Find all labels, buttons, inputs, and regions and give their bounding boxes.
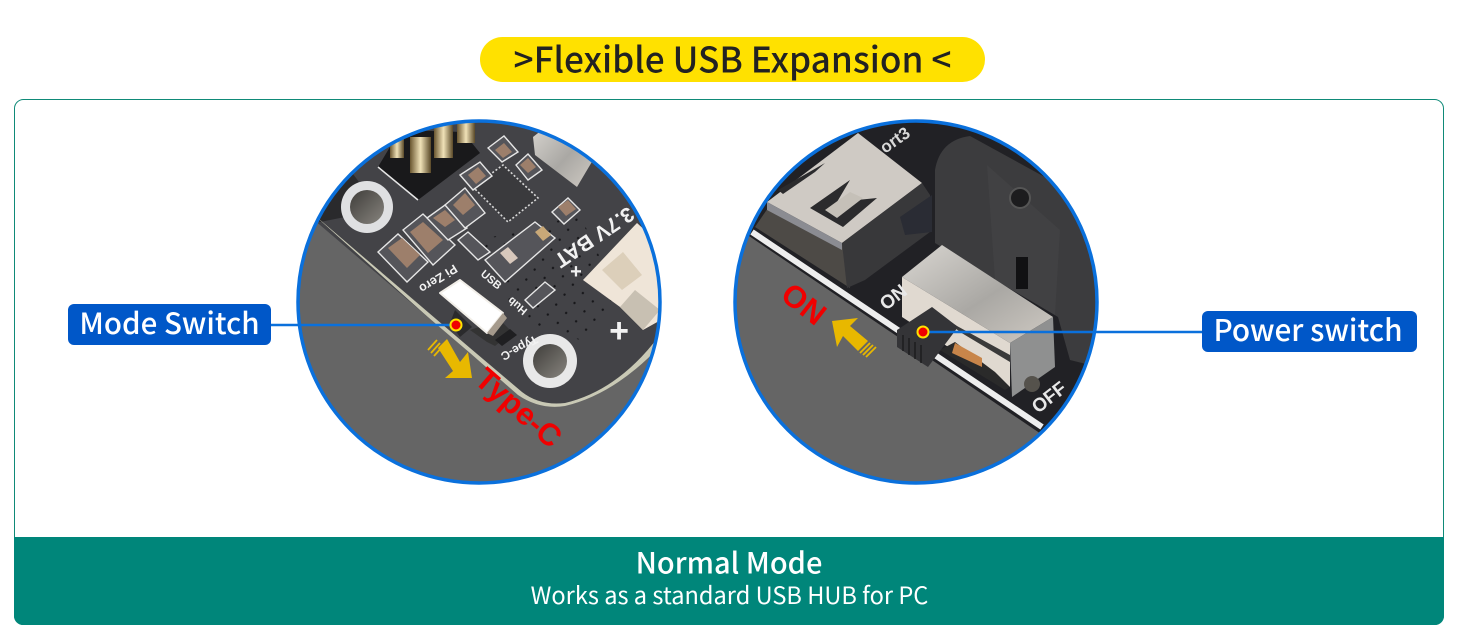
silk labels bbox=[416, 202, 638, 364]
vias bbox=[485, 218, 612, 340]
silk labels: Type-C bbox=[498, 332, 540, 364]
silk: ON OFF: ON bbox=[876, 281, 912, 315]
board dark upper-left bbox=[319, 174, 359, 222]
arrow: toward ON bbox=[832, 318, 876, 357]
label: ON: ON bbox=[775, 276, 833, 332]
callout: power switch: Power switch bbox=[1213, 307, 1403, 350]
arrow: toward Type-C bbox=[428, 339, 472, 378]
capacitors bbox=[388, 143, 576, 268]
footer heading: Normal Mode bbox=[636, 540, 822, 582]
silk labels: 3.7V BAT bbox=[550, 202, 638, 272]
footer description: Works as a standard USB HUB for PC bbox=[531, 577, 928, 611]
board edge bbox=[312, 213, 662, 410]
chip bbox=[473, 165, 538, 222]
mounting hole bottom bbox=[523, 334, 577, 388]
label: Type-C: Type-C bbox=[468, 361, 569, 455]
silkscreen pads bbox=[378, 136, 580, 308]
crystal bbox=[533, 132, 592, 187]
connector bbox=[583, 223, 658, 330]
footer band: normal mode bbox=[14, 537, 1444, 625]
battery holder bbox=[935, 136, 1096, 364]
silk labels: + bbox=[570, 261, 582, 283]
photo: mode switch close-up bbox=[296, 119, 662, 485]
gray base cutaway bbox=[300, 224, 650, 482]
silk: ON OFF: OFF bbox=[1028, 378, 1071, 418]
silk: port3: ort3 bbox=[876, 123, 914, 157]
photo: power switch close-up bbox=[733, 119, 1099, 485]
board edge bbox=[752, 232, 1042, 427]
callout: mode switch bbox=[68, 301, 462, 345]
switch bbox=[440, 280, 517, 346]
mounting hole top bbox=[341, 181, 393, 233]
silk labels: Pi Zero bbox=[416, 261, 460, 296]
silk labels: Hub bbox=[506, 294, 530, 317]
USB port bbox=[755, 133, 932, 288]
gray base cutaway bbox=[736, 236, 1039, 482]
slide knob bbox=[897, 307, 958, 367]
title badge: >Flexible USB Expansion < bbox=[514, 32, 951, 84]
callout: mode switch: Mode Switch bbox=[79, 301, 260, 343]
silk labels: + bbox=[609, 312, 629, 350]
slide switch body bbox=[897, 245, 1055, 397]
silk: ON OFF bbox=[880, 284, 1064, 412]
callout: power switch bbox=[918, 307, 1417, 352]
pin header bbox=[378, 115, 480, 200]
silk labels: USB bbox=[478, 268, 504, 292]
